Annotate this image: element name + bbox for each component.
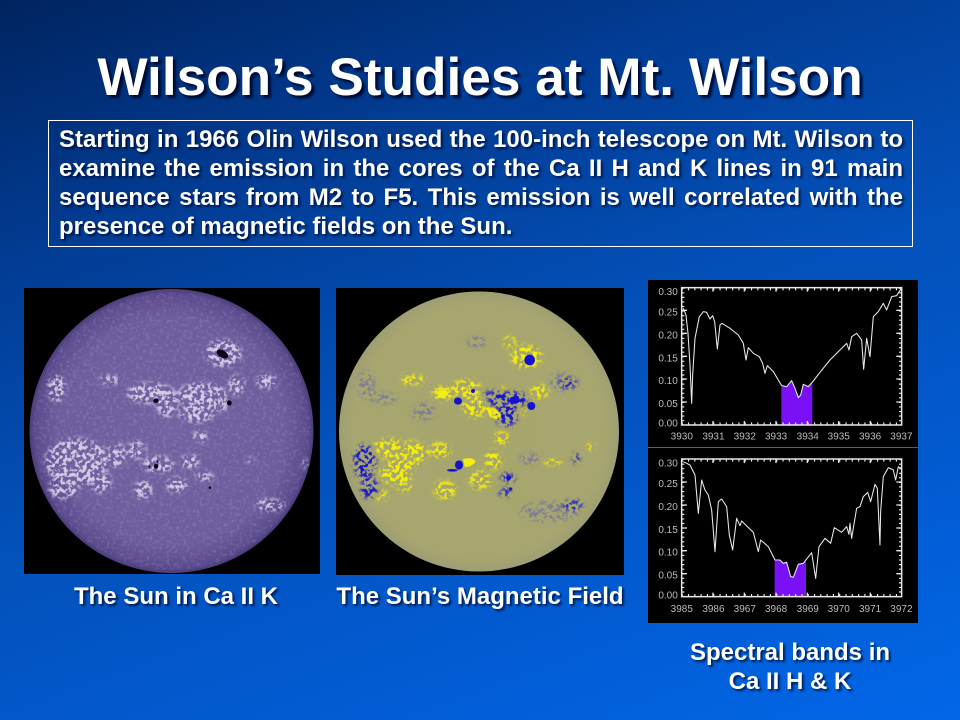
- text box: description: [48, 120, 913, 247]
- chart: Ca II K spectrum: 0.25: [658, 307, 678, 318]
- negative field: blue: [353, 355, 583, 510]
- panel: Sun's magnetic field: [336, 288, 624, 575]
- chart: Ca II H spectrum: [658, 458, 913, 615]
- chart: Ca II K spectrum: 0.20: [658, 330, 678, 341]
- chart: Ca II K spectrum: 0.05: [658, 399, 678, 410]
- chart: Ca II K spectrum: 0.30: [658, 287, 678, 298]
- caption: Sun's magnetic field: The Sun’s Magnetic Field: [336, 583, 624, 610]
- chart: Ca II H spectrum: 0.20: [658, 502, 678, 513]
- text box: description: sequence stars from M2 to F5. This emission is well correlated with the: [59, 184, 903, 211]
- chart: Ca II H spectrum: 0.30: [658, 458, 678, 469]
- chart: Ca II H spectrum: 3969: [797, 604, 819, 615]
- faint mixed polarity: [357, 336, 580, 522]
- chart: Ca II K spectrum: [658, 287, 913, 443]
- caption: spectral bands: [690, 639, 892, 695]
- chart: Ca II H spectrum: 3970: [828, 604, 850, 615]
- chart: Ca II H spectrum: 0.25: [658, 479, 678, 490]
- chart: Ca II K spectrum: 3936: [859, 432, 882, 443]
- magnetogram disc: [339, 292, 619, 572]
- disc granulation: [32, 292, 310, 570]
- sunspots: [148, 348, 232, 489]
- text box: description: Starting in 1966 Olin Wilson used the 100-inch telescope on Mt. Wilson to: [59, 126, 903, 153]
- chart: Ca II K spectrum: 3931: [702, 432, 725, 443]
- chart: Ca II H spectrum: 0.00: [658, 590, 678, 601]
- purple K band: [781, 381, 812, 425]
- caption: spectral bands: Spectral bands in: [690, 639, 890, 666]
- text box: description: examine the emission in the cores of the Ca II H and K lines in 91 main: [59, 155, 903, 182]
- panel: Sun in Ca II K: [24, 288, 320, 574]
- chart: Ca II K spectrum: 3937: [890, 432, 913, 443]
- chart: Ca II K spectrum: 0.15: [658, 353, 678, 364]
- chart: Ca II K spectrum: 3933: [765, 432, 788, 443]
- chart: Ca II H spectrum: 3972: [890, 604, 913, 615]
- chart: Ca II K spectrum: 3930: [671, 432, 693, 443]
- chart: Ca II H spectrum: 3968: [765, 604, 788, 615]
- chart: Ca II H spectrum: 0.15: [658, 525, 678, 536]
- panel: spectral band charts: [648, 280, 918, 623]
- chart: Ca II K spectrum: 3932: [734, 432, 756, 443]
- bright plage regions: [45, 339, 308, 511]
- purple H band: [775, 558, 806, 597]
- chart: Ca II K spectrum: 0.10: [658, 376, 678, 387]
- solar disc: [30, 289, 314, 573]
- chart: Ca II K spectrum: 0.00: [658, 419, 678, 430]
- chart: Ca II K spectrum: 3935: [828, 432, 850, 443]
- chart: Ca II H spectrum: 3967: [734, 604, 756, 615]
- chart: Ca II H spectrum: 3986: [702, 604, 725, 615]
- chart: Ca II H spectrum: 0.10: [658, 548, 678, 559]
- positive field: yellow: [372, 336, 596, 501]
- chart: Ca II H spectrum: 0.05: [658, 571, 678, 582]
- chart: Ca II H spectrum: 3971: [859, 604, 882, 615]
- title: Wilson’s Studies at Mt. Wilson: [97, 48, 863, 107]
- chart: Ca II K spectrum: 3934: [797, 432, 819, 443]
- text box: description: presence of magnetic fields on the Sun.: [59, 213, 512, 240]
- caption: spectral bands: Ca II H & K: [729, 668, 851, 695]
- chart: Ca II H spectrum: 3985: [671, 604, 693, 615]
- caption: Sun in Ca II K: The Sun in Ca II K: [74, 583, 278, 610]
